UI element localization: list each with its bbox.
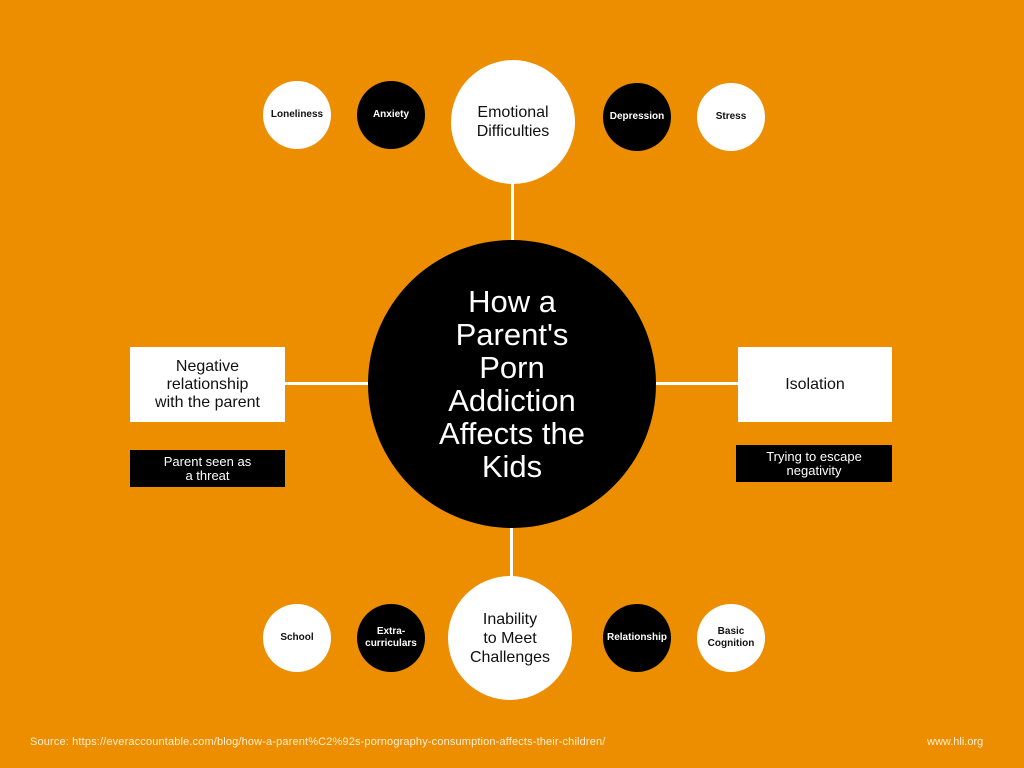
circle: extracurriculars: curriculars (365, 638, 417, 649)
box: negative relationship: relationship (167, 376, 248, 392)
circle: stress: Stress (716, 111, 746, 122)
circle: anxiety: Anxiety (373, 109, 409, 120)
circle: relationship (603, 604, 671, 672)
box: negative relationship (130, 347, 285, 422)
bottom circle: inability to meet challenges: Challenges (470, 648, 550, 666)
circle: school (263, 604, 331, 672)
circle: extracurriculars (357, 604, 425, 672)
bottom circle: inability to meet challenges: to Meet (483, 630, 537, 646)
footer source: Source: https://everaccountable.com/blog/how-a-parent%C2%92s-pornography-consumption-affects-their-children/ (30, 736, 605, 748)
top circle: emotional difficulties: Difficulties (477, 123, 549, 140)
circle: extracurriculars: Extra- (377, 626, 405, 637)
circle: depression (603, 83, 671, 151)
box: isolation (738, 347, 892, 422)
box: parent seen as threat: a threat (185, 468, 230, 482)
connector lines (263, 60, 765, 700)
circle: loneliness: Loneliness (271, 109, 323, 120)
central circle title: Kids (482, 449, 542, 484)
circle: school: School (280, 632, 314, 643)
top circle: emotional difficulties (451, 60, 575, 184)
circle: basic cognition: Cognition (708, 638, 754, 649)
central circle title (368, 240, 656, 528)
top circle: emotional difficulties: Emotional (477, 104, 549, 121)
box: parent seen as threat (130, 450, 285, 487)
circle: depression: Depression (610, 111, 664, 122)
bottom circle: inability to meet challenges (448, 576, 572, 700)
box: trying to escape negativity (736, 445, 892, 482)
central circle title: Affects the (439, 416, 585, 451)
box: trying to escape negativity: Trying to escape (766, 448, 862, 464)
bottom circle: inability to meet challenges: Inability (483, 610, 537, 628)
circle: relationship: Relationship (607, 632, 667, 643)
box: trying to escape negativity: negativity (787, 462, 841, 478)
central circle title: Porn (479, 350, 545, 385)
box: parent seen as threat: Parent seen as (164, 454, 251, 468)
circle: basic cognition (697, 604, 765, 672)
circle: anxiety (357, 81, 425, 149)
box: isolation: Isolation (785, 376, 845, 392)
box: negative relationship: Negative (176, 358, 239, 374)
circle: stress (697, 83, 765, 151)
central circle title: Addiction (448, 383, 576, 418)
central circle title: Parent's (456, 317, 568, 352)
central circle title: How a (468, 284, 556, 319)
box: negative relationship: with the parent (155, 394, 260, 410)
circle: loneliness (263, 81, 331, 149)
footer site: www.hli.org (927, 736, 983, 748)
circle: basic cognition: Basic (718, 626, 744, 637)
